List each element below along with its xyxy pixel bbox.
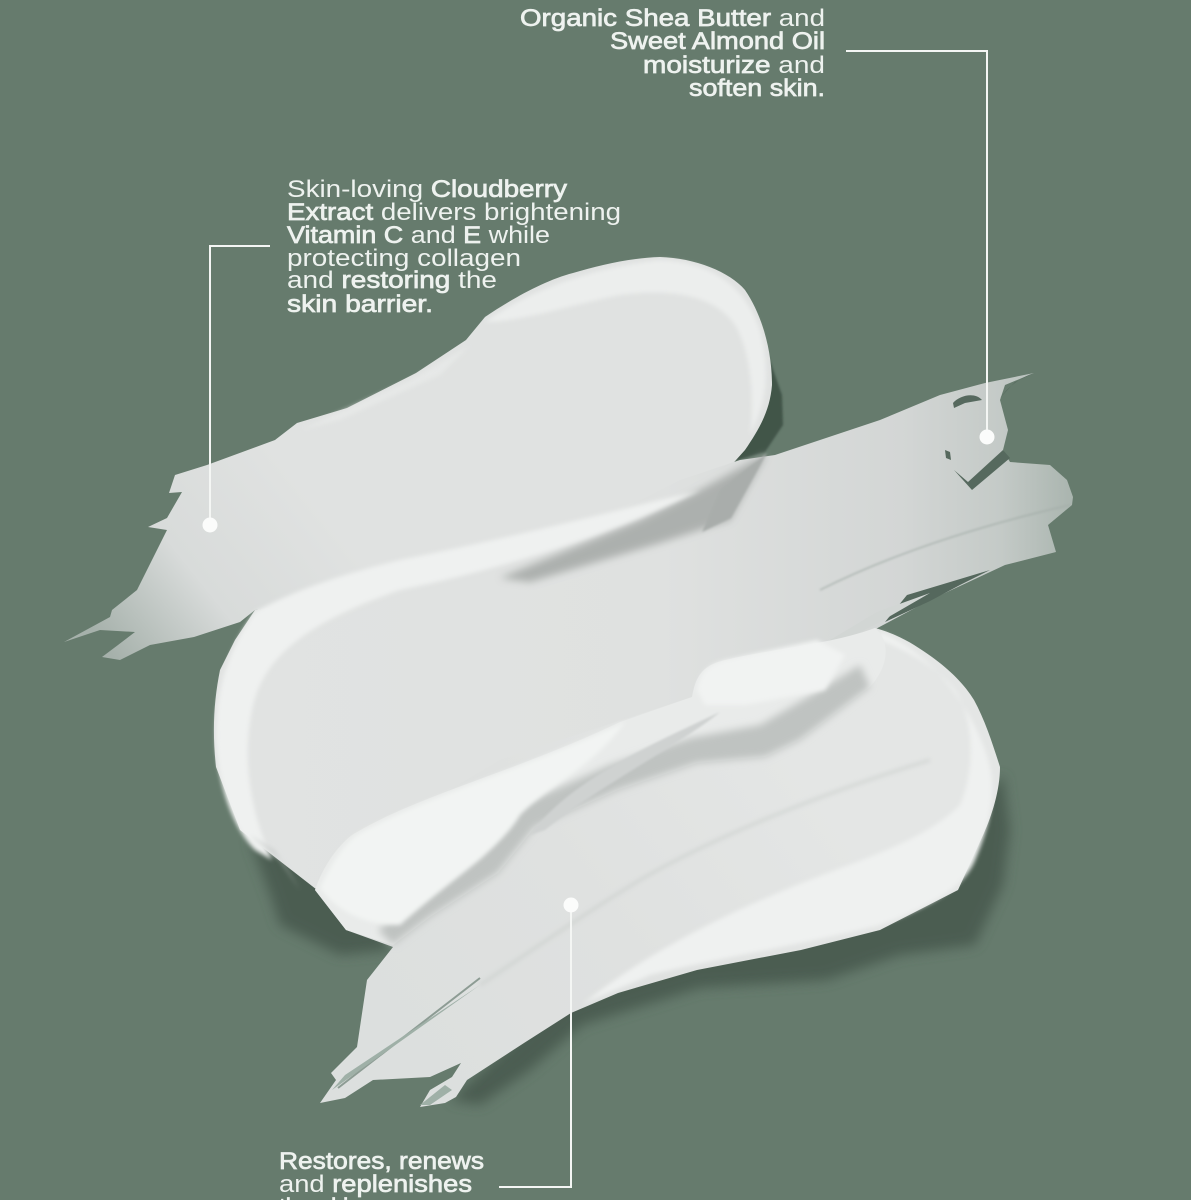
cream swatch <box>64 257 1073 1107</box>
callout text: and replenishes <box>279 1171 472 1198</box>
callout: restores <box>279 898 578 1200</box>
left lump <box>250 835 300 890</box>
cast shadow: upper stroke <box>700 290 783 470</box>
torn tips <box>332 985 480 1105</box>
rim highlight <box>485 260 766 435</box>
callout text <box>520 5 825 102</box>
callout text: Organic Shea Butter and <box>520 5 825 32</box>
callout text: Restores, renews <box>279 1148 484 1175</box>
leader line <box>499 905 571 1187</box>
groove <box>480 760 930 985</box>
marker dot <box>980 430 994 444</box>
cast shadow: lower blob <box>250 775 1010 1105</box>
callout text: Sweet Almond Oil <box>610 28 825 55</box>
ridge base <box>315 628 886 945</box>
callout text: Extract delivers brightening <box>287 199 621 226</box>
ridge fat end highlight <box>320 722 625 925</box>
groove <box>820 505 1070 590</box>
callout text: skin barrier. <box>287 291 433 318</box>
stroke: upper left <box>64 257 772 660</box>
marker dot <box>202 518 218 532</box>
callout: cloudberry extract <box>202 176 621 532</box>
callout text: moisturize and <box>643 52 825 79</box>
ridge lump <box>697 640 845 705</box>
fold shadow under upper stroke <box>500 453 767 582</box>
callout text: and restoring the <box>287 267 497 294</box>
holes in torn end <box>945 373 1034 490</box>
lower edge sliver <box>820 593 930 650</box>
callout text: soften skin. <box>689 75 825 102</box>
callout text <box>287 176 621 318</box>
callout text: protecting collagen <box>287 245 521 272</box>
white right margin <box>1191 0 1200 1200</box>
marker dot <box>564 898 578 912</box>
callout text: Skin-loving Cloudberry <box>287 176 567 203</box>
stroke: middle <box>214 373 1073 900</box>
callout text: Vitamin C and E while <box>287 222 550 249</box>
outer rim highlight <box>582 632 992 1005</box>
ridge crease <box>530 712 720 835</box>
ridge shading <box>378 665 870 945</box>
lower edge slit <box>885 570 990 622</box>
leader line <box>846 51 987 437</box>
callout text <box>279 1148 484 1200</box>
stroke: lower <box>250 628 1000 1107</box>
callout: shea butter and almond oil <box>520 5 994 444</box>
left rim <box>216 490 700 860</box>
leader line <box>210 246 270 525</box>
